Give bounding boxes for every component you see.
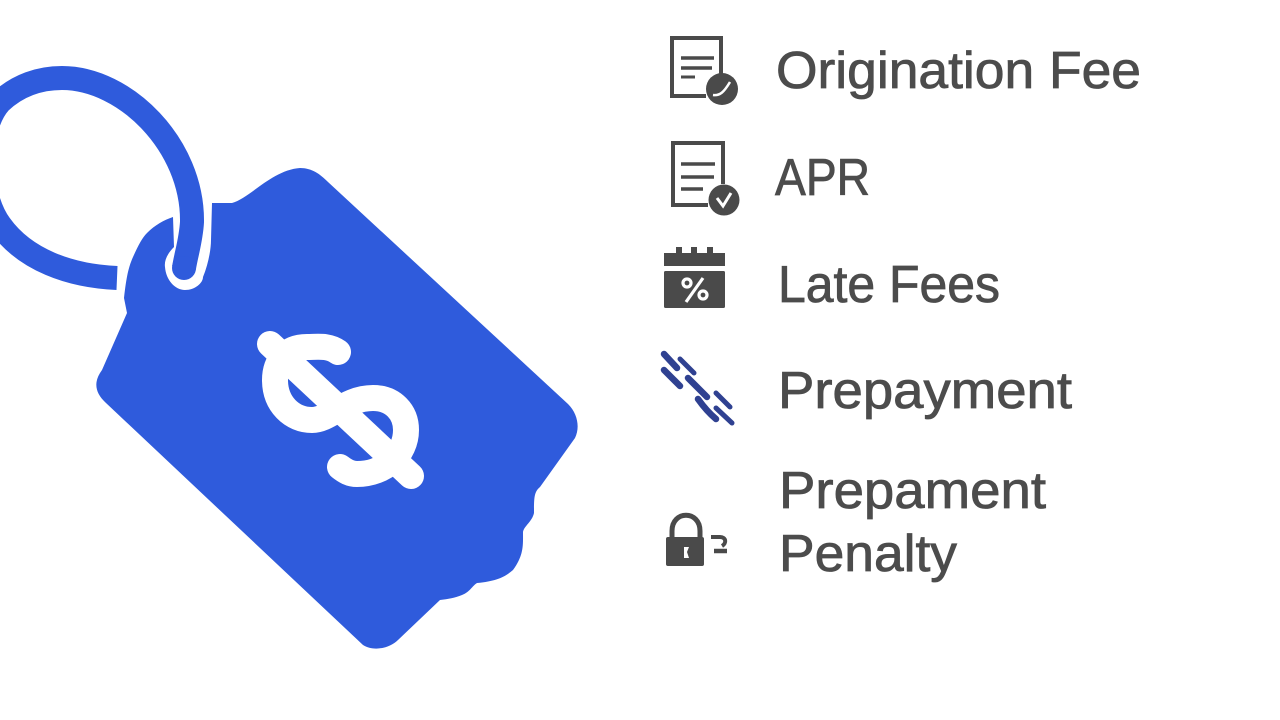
icon: blue price tag with dollar sign [0, 78, 578, 649]
icon: document with check, origination fee [672, 38, 738, 105]
label: Prepament Penalty: Penalty [779, 525, 957, 583]
icon: padlock [666, 515, 727, 566]
icon: broken chain [664, 354, 732, 423]
icon: document with check, APR [673, 143, 740, 216]
label: Late Fees: Late Fees [778, 256, 1000, 314]
label: Prepament Penalty: Prepament [779, 462, 1047, 520]
tag body [96, 168, 578, 649]
label: APR: APR [775, 149, 870, 207]
dollar sign [270, 344, 411, 476]
label: Prepayment: Prepayment [778, 362, 1073, 420]
label: Prepament Penalty [779, 462, 1047, 583]
label: Origination Fee: Origination Fee [776, 42, 1141, 100]
tag ring [0, 78, 196, 280]
icon: calendar with percent [664, 247, 725, 308]
